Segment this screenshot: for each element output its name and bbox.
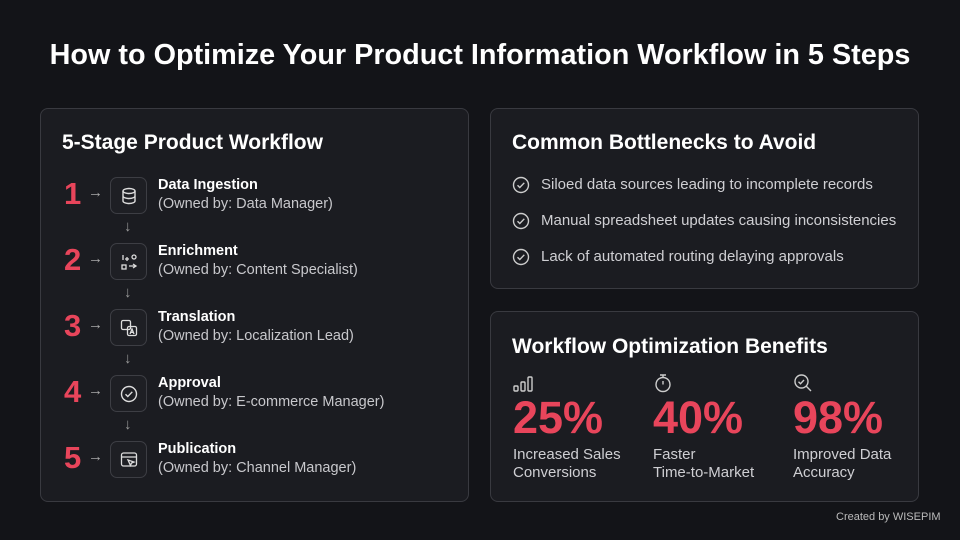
step 3: 3 bbox=[64, 308, 81, 343]
text: Translation bbox=[158, 309, 235, 325]
bottleneck 2: Manual spreadsheet updates causing inconsistencies bbox=[541, 212, 896, 229]
text: Approval bbox=[158, 375, 221, 391]
text: ↓ bbox=[124, 416, 132, 433]
benefits heading: Workflow Optimization Benefits bbox=[512, 335, 828, 358]
panel: bottlenecks bbox=[490, 108, 919, 289]
text: → bbox=[88, 382, 103, 399]
benefit 3: Improved Data bbox=[793, 446, 891, 463]
icon: publication bbox=[110, 441, 147, 478]
icon: database bbox=[110, 177, 147, 214]
title: How to Optimize Your Product Information Workflow in 5 Steps bbox=[50, 39, 910, 71]
bottleneck 3: Lack of automated routing delaying approvals bbox=[541, 248, 844, 265]
benefit 2: Time-to-Market bbox=[653, 464, 754, 481]
icon: translation bbox=[110, 309, 147, 346]
text: ↓ bbox=[124, 218, 132, 235]
benefit 2: 40% bbox=[653, 392, 743, 443]
benefit 1: 25% bbox=[513, 392, 603, 443]
step 2: 2 bbox=[64, 242, 81, 277]
benefit 2 bbox=[653, 374, 754, 481]
benefit 2: Faster bbox=[653, 446, 696, 463]
text: (Owned by: Localization Lead) bbox=[158, 328, 354, 344]
step 5: 5 bbox=[64, 440, 81, 475]
benefit 3: Accuracy bbox=[793, 464, 855, 481]
panel: benefits bbox=[490, 311, 919, 502]
text: (Owned by: Content Specialist) bbox=[158, 262, 358, 278]
text: → bbox=[88, 184, 103, 201]
benefit 1: Conversions bbox=[513, 464, 596, 481]
text: (Owned by: E-commerce Manager) bbox=[158, 394, 384, 410]
text: Publication bbox=[158, 441, 236, 457]
bottleneck 1: Siloed data sources leading to incomplete records bbox=[541, 176, 873, 193]
panel: workflow bbox=[40, 108, 469, 502]
benefit 3 bbox=[793, 374, 892, 481]
text: (Owned by: Data Manager) bbox=[158, 196, 333, 212]
icon: enrichment bbox=[110, 243, 147, 280]
text: → bbox=[88, 448, 103, 465]
benefit 1 bbox=[513, 376, 621, 481]
text: (Owned by: Channel Manager) bbox=[158, 460, 356, 476]
workflow heading: 5-Stage Product Workflow bbox=[62, 131, 323, 154]
text: ↓ bbox=[124, 350, 132, 367]
step 1: 1 bbox=[64, 176, 81, 211]
text: Enrichment bbox=[158, 243, 238, 259]
footer credit: Created by WISEPIM bbox=[836, 511, 941, 523]
text: → bbox=[88, 250, 103, 267]
benefit 3: 98% bbox=[793, 392, 883, 443]
benefit 1: Increased Sales bbox=[513, 446, 621, 463]
step 4: 4 bbox=[64, 374, 81, 409]
text: Data Ingestion bbox=[158, 177, 258, 193]
bottlenecks heading: Common Bottlenecks to Avoid bbox=[512, 131, 816, 154]
text: → bbox=[88, 316, 103, 333]
text: ↓ bbox=[124, 284, 132, 301]
icon: approval bbox=[110, 375, 147, 412]
